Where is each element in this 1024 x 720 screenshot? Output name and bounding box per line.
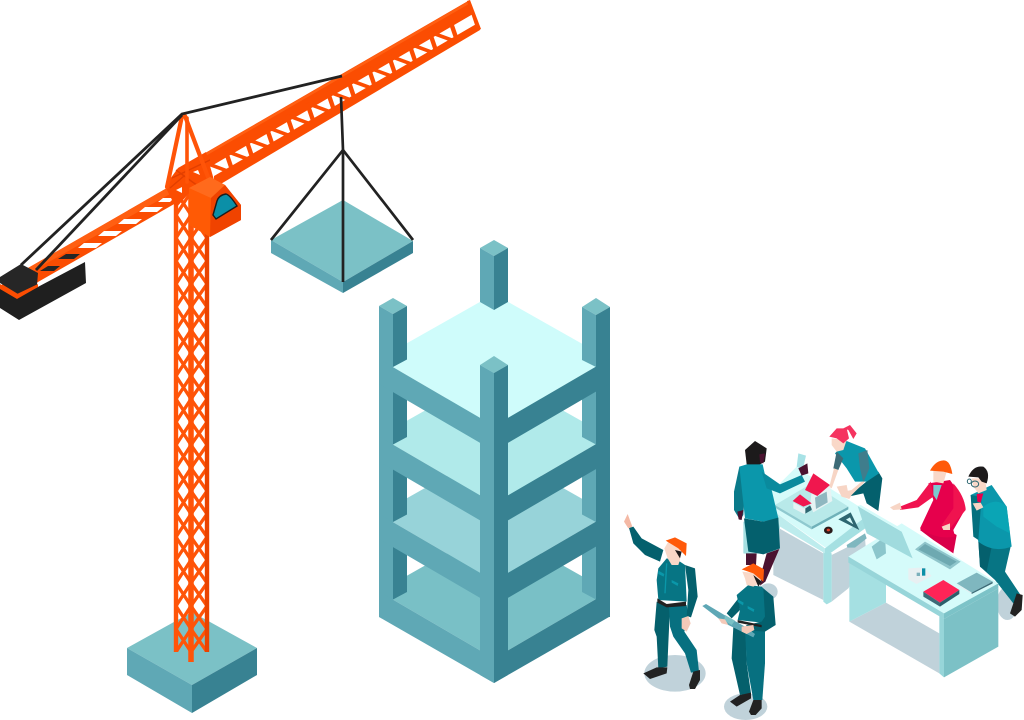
front column xyxy=(480,356,508,683)
front desk group with red suit woman and man xyxy=(848,460,1023,677)
crane cables xyxy=(21,76,342,270)
crane main jib truss xyxy=(200,0,481,188)
crane hub joint xyxy=(165,152,214,208)
house model xyxy=(775,473,848,529)
worker pointing up xyxy=(624,514,706,692)
top beams xyxy=(379,359,609,451)
back column xyxy=(480,240,508,256)
computer monitor xyxy=(858,505,913,559)
crane operator cab xyxy=(189,177,241,237)
site workers group xyxy=(624,514,776,720)
woman with black hair xyxy=(734,441,808,600)
hook and slings xyxy=(271,97,413,282)
top left column xyxy=(379,298,407,400)
top right column xyxy=(582,298,610,400)
crane base slab xyxy=(127,612,257,713)
level 3 floor and columns xyxy=(379,449,610,606)
woman in red suit xyxy=(890,460,966,553)
grey tablet xyxy=(957,573,993,594)
front desk xyxy=(848,523,998,677)
level 2 floor and columns xyxy=(379,372,610,528)
concrete building frame xyxy=(379,240,610,683)
crane counterweight box xyxy=(0,262,86,320)
top slab xyxy=(379,294,609,426)
level 4 floor and columns xyxy=(379,526,610,683)
papers on desk xyxy=(908,567,932,584)
back column shaft xyxy=(480,248,508,310)
counterweight top block xyxy=(0,264,38,299)
red book xyxy=(923,580,959,607)
crane tower lattice xyxy=(174,192,209,662)
back desk group with two standing women xyxy=(734,425,882,604)
set square and desk item xyxy=(824,512,859,534)
crane counter jib xyxy=(0,188,178,297)
crane mast frame xyxy=(167,116,208,187)
hanging concrete slab xyxy=(271,200,413,293)
woman with pink hair xyxy=(829,425,882,511)
worker with clipboard xyxy=(702,563,776,720)
keyboard xyxy=(915,542,961,569)
man with glasses xyxy=(967,466,1023,620)
back desk xyxy=(743,467,870,604)
